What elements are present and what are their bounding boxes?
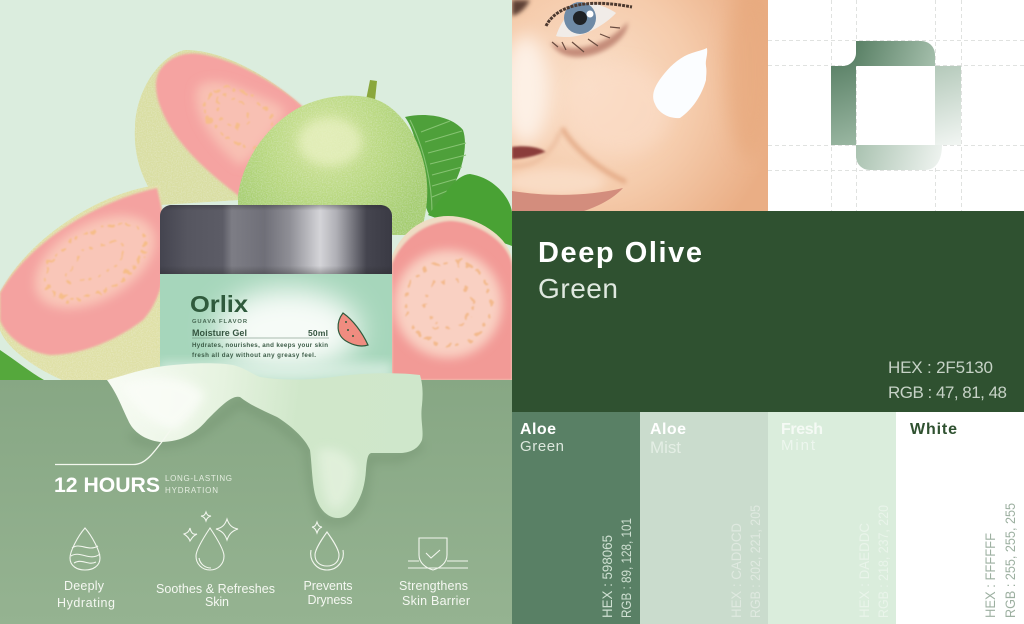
stat caption: HYDRATION — [165, 486, 218, 495]
panel: textured green ground — [0, 380, 512, 624]
swatch: Aloe Mist: Aloe — [650, 421, 686, 438]
label: prevents dryness: Prevents — [304, 579, 352, 593]
label: product name: Moisture Gel — [192, 328, 247, 338]
illustration: halved guava, left — [0, 185, 175, 380]
swatch subtitle: Green — [538, 273, 618, 304]
colour values: HEX : 2F5130 — [888, 358, 993, 377]
swatch: Aloe Green: RGB : 89, 128, 101 — [619, 518, 634, 618]
swatch: Aloe Green — [512, 412, 640, 624]
panel: product hero background — [0, 0, 512, 380]
icon: shield on skin layers — [408, 538, 468, 570]
stat caption: LONG-LASTING — [165, 474, 232, 483]
icon: guava leaves — [0, 115, 512, 380]
lips — [512, 188, 623, 211]
swatch: Aloe Green: Green — [520, 438, 564, 455]
stat: 12 hours: 12 HOURS — [54, 474, 160, 497]
label: brand name: Orlix — [190, 291, 248, 317]
label: flavor: GUAVA FLAVOR — [192, 319, 248, 325]
swatch: Aloe Green: HEX : 598065 — [600, 535, 615, 618]
swatch: White: White — [910, 421, 957, 438]
guava and leaf arrangement — [0, 50, 512, 380]
swatch: Aloe Mist: Mist — [650, 438, 681, 457]
eye — [546, 2, 632, 52]
illustration: halved guava, right — [390, 216, 512, 380]
cream drip — [107, 363, 423, 518]
label: soothes and refreshes: Skin — [205, 595, 229, 609]
swatch: Fresh Mint: Mint — [781, 437, 816, 454]
icon: guava slice — [338, 313, 368, 346]
callout: 12 hours hydration — [54, 428, 232, 497]
colour values: RGB : 47, 81, 48 — [888, 383, 1007, 402]
swatch: Aloe Mist: RGB : 202, 221, 205 — [748, 505, 763, 618]
nose — [512, 132, 560, 166]
photo: model face with cream — [502, 0, 774, 211]
swatch: Fresh Mint: Fresh — [781, 421, 823, 438]
jar body — [160, 274, 392, 380]
label: prevents dryness: Dryness — [308, 593, 352, 607]
jar lid — [160, 205, 392, 274]
label: soothes and refreshes: Soothes & Refreshes — [156, 582, 275, 596]
panel: Deep Olive Green — [512, 211, 1024, 412]
swatch: Fresh Mint — [768, 412, 896, 624]
illustration: halved guava, back — [135, 50, 303, 205]
smile line — [562, 128, 626, 182]
swatch: Aloe Mist — [640, 412, 768, 624]
icon: layered water drop — [70, 528, 100, 570]
label: description: Hydrates, nourishes, and keeps your skin — [192, 342, 328, 349]
label: strengthens skin barrier: Skin Barrier — [402, 594, 470, 608]
label: volume: 50ml — [308, 328, 328, 338]
cream swatch — [653, 48, 707, 118]
illustration: whole guava — [238, 80, 427, 235]
label: deeply hydrating: Deeply — [64, 579, 105, 593]
swatch: Aloe Green: Aloe — [520, 421, 556, 438]
product jar — [160, 205, 392, 380]
swatch: Aloe Mist: HEX : CADDCD — [729, 523, 744, 618]
swatch: White: RGB : 255, 255, 255 — [1003, 503, 1018, 618]
cream drip shadow — [130, 402, 422, 521]
swatch: White — [896, 412, 1024, 624]
swatch: White: HEX : FFFFFF — [983, 533, 998, 618]
swatch title: Deep Olive — [538, 237, 702, 269]
icon: drop with protective arcs — [311, 522, 343, 570]
under-eye shadow — [550, 22, 628, 57]
swatch: Fresh Mint: RGB : 218, 237, 220 — [876, 505, 891, 618]
label: description: fresh all day without any greasy feel. — [192, 352, 316, 359]
eyebrow — [512, 0, 530, 16]
swatch: Fresh Mint: HEX : DAEDDC — [857, 523, 872, 618]
icon: sparkling water drop — [184, 512, 238, 570]
panel: logo construction — [768, 0, 1024, 211]
label: strengthens skin barrier: Strengthens — [399, 579, 468, 593]
label: deeply hydrating: Hydrating — [57, 596, 115, 610]
logo mark — [831, 41, 961, 170]
